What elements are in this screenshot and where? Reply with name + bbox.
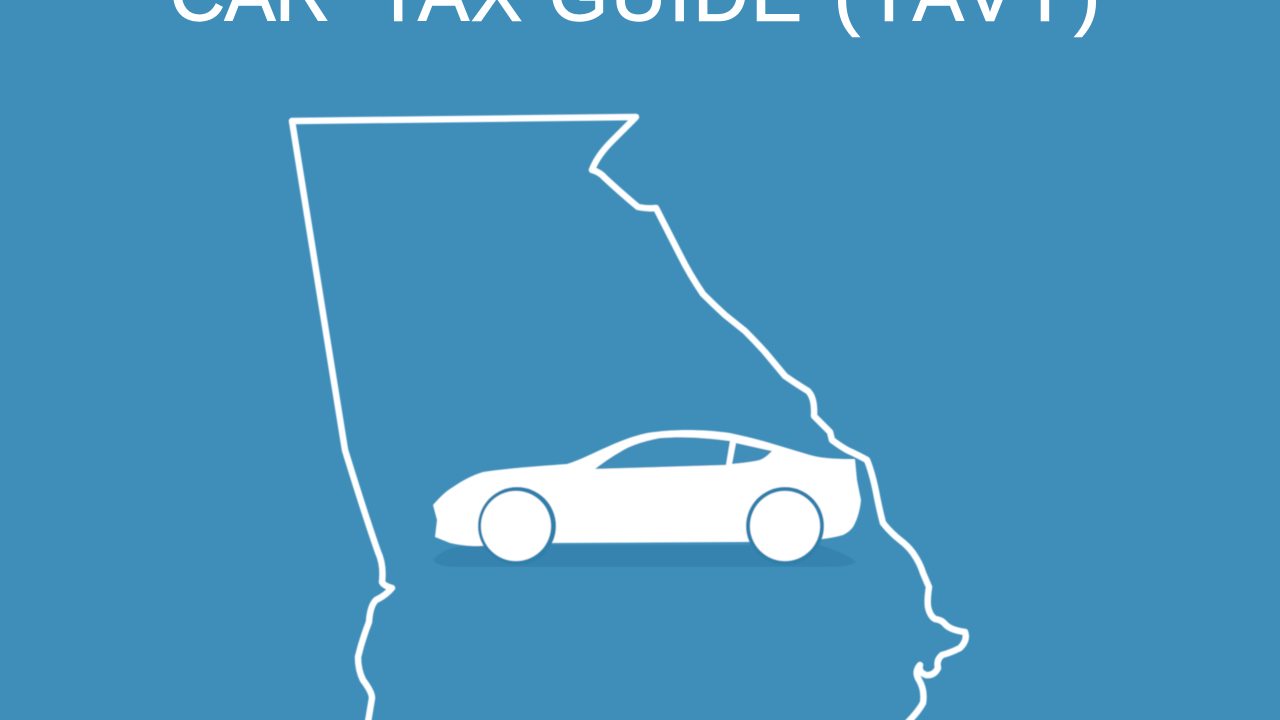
front wheel arch	[478, 487, 556, 565]
title	[170, 0, 1100, 38]
icon: car	[433, 430, 861, 567]
car ground shadow	[433, 545, 856, 567]
front wheel	[481, 491, 551, 561]
rear wheel	[750, 491, 820, 561]
rear window	[732, 443, 772, 464]
car body	[433, 430, 861, 546]
map outline: Georgia state	[292, 117, 966, 720]
windshield and side window	[595, 437, 730, 469]
rear wheel arch	[746, 487, 824, 565]
